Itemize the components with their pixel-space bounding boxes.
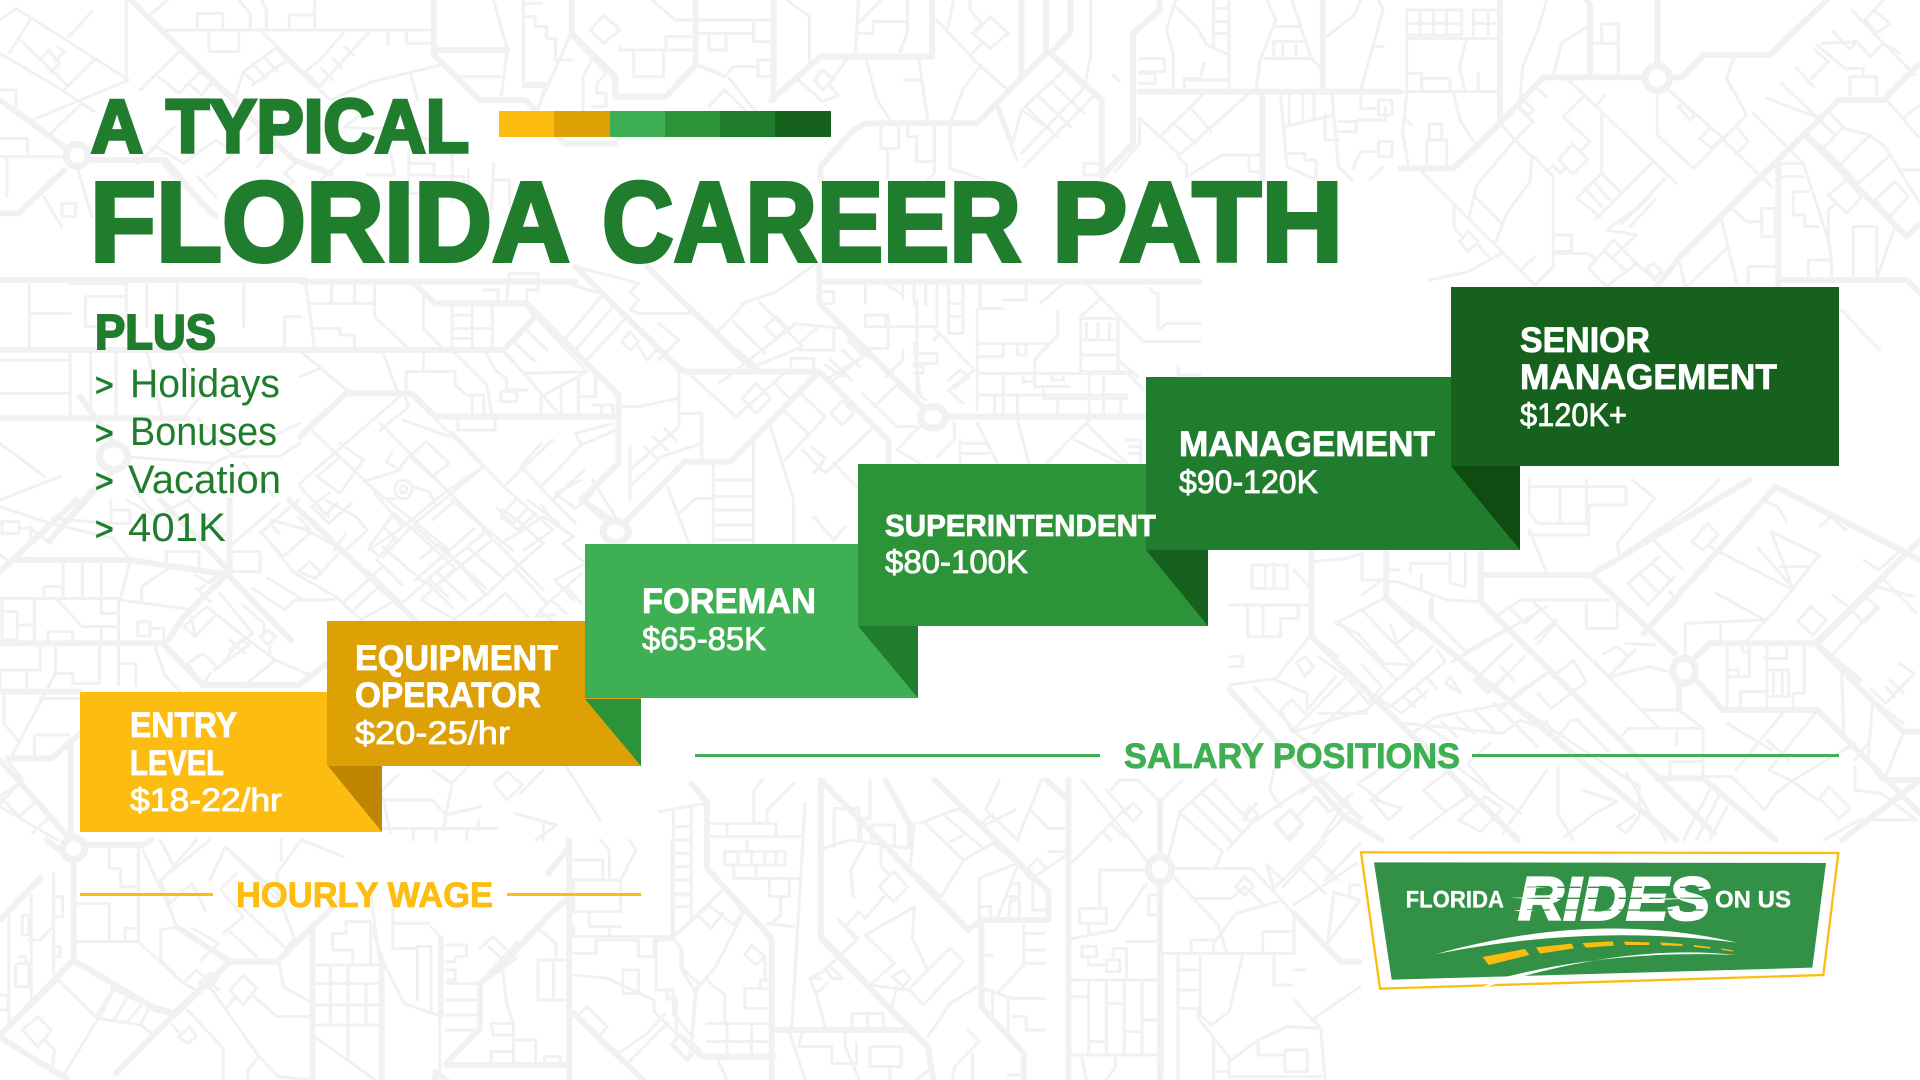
text: superintendent: $80-100K xyxy=(885,544,1028,580)
title: A TYPICAL: TYPICAL xyxy=(166,84,469,168)
text: equipment operator: $20-25/hr xyxy=(355,715,510,751)
step: senior management panel xyxy=(1451,287,1839,466)
legend: hourly wage: HOURLY WAGE xyxy=(236,876,493,915)
benefits list: > xyxy=(95,415,114,451)
step: equipment operator panel xyxy=(327,621,641,766)
benefits list: Vacation xyxy=(128,458,281,502)
step: foreman panel xyxy=(585,544,918,698)
logo: Florida Rides On Us: RIDES xyxy=(1518,865,1710,932)
title: FLORIDA CAREER PATH: FLORIDA xyxy=(90,159,570,285)
text: senior management xyxy=(1520,321,1777,433)
logo: Florida Rides On Us xyxy=(1361,852,1838,992)
text: foreman xyxy=(642,582,816,657)
title: A TYPICAL: A xyxy=(91,84,143,168)
legend: salary positions xyxy=(695,737,1839,776)
text: senior management: SENIOR xyxy=(1520,321,1650,360)
benefits list: > xyxy=(95,367,114,403)
text: management: MANAGEMENT xyxy=(1179,425,1435,464)
text: superintendent xyxy=(885,508,1156,580)
step: management panel xyxy=(1146,377,1520,550)
logo: Florida Rides On Us: ON US xyxy=(1715,886,1791,913)
step: superintendent panel xyxy=(858,464,1208,626)
colour bar xyxy=(499,111,831,137)
text: management: $90-120K xyxy=(1179,464,1318,500)
title: FLORIDA CAREER PATH: PATH xyxy=(1052,159,1343,285)
benefits list: Holidays xyxy=(130,362,280,406)
benefits list: > xyxy=(95,511,114,547)
text: entry level: $18-22/hr xyxy=(130,782,282,818)
text: entry level: ENTRY xyxy=(130,706,237,745)
text: superintendent: SUPERINTENDENT xyxy=(885,508,1156,543)
title: FLORIDA CAREER PATH: CAREER xyxy=(602,159,1021,285)
text: entry level xyxy=(130,706,282,818)
text: foreman: $65-85K xyxy=(642,621,766,657)
text: entry level: LEVEL xyxy=(130,744,224,783)
benefits list: 401K xyxy=(128,506,226,550)
title: FLORIDA CAREER PATH xyxy=(90,159,1343,285)
text: senior management: MANAGEMENT xyxy=(1520,358,1777,397)
step: entry level panel xyxy=(80,692,382,832)
benefits list: Bonuses xyxy=(130,410,277,454)
benefits list xyxy=(95,306,281,550)
text: management xyxy=(1179,425,1435,500)
logo: Florida Rides On Us: FLORIDA xyxy=(1406,886,1504,913)
text: senior management: $120K+ xyxy=(1520,397,1627,433)
legend: salary positions: SALARY POSITIONS xyxy=(1124,737,1460,776)
text: equipment operator: OPERATOR xyxy=(355,676,541,715)
heading: PLUS: PLUS xyxy=(95,306,216,360)
text: equipment operator: EQUIPMENT xyxy=(355,639,558,678)
text: foreman: FOREMAN xyxy=(642,582,816,621)
legend: hourly wage xyxy=(80,876,641,915)
text: equipment operator xyxy=(355,639,558,751)
benefits list: > xyxy=(95,463,114,499)
